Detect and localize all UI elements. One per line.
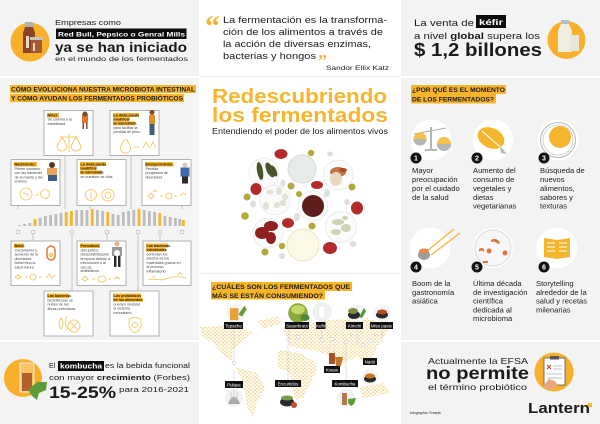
bar chart: diversity over life <box>16 209 185 234</box>
item 4: chopsticks: 4 <box>414 264 418 272</box>
title: los fermentados <box>212 104 388 127</box>
icon: kombucha glass with mint <box>4 359 47 400</box>
label: Kefir <box>316 322 326 329</box>
card: nacimiento: entorno <box>14 180 27 184</box>
item 1: health <box>410 120 460 202</box>
card: bacterias intestinales: controlan los <box>146 252 168 256</box>
text: el kombucha: es la bebida funcional <box>105 363 191 370</box>
label: Kvass <box>324 366 340 373</box>
card: bacterias beneficiosas <box>44 291 93 336</box>
heading: fermentados consumidos: ¿CUÁLES SON LOS FERMENTADOS QUE <box>212 284 350 291</box>
item 6: book: 6 <box>542 264 546 272</box>
card: dieta días: la microbiota <box>80 171 104 175</box>
item 5: petri microbiome: Última década <box>473 279 522 288</box>
item 6: book: alrededor de la <box>536 288 587 297</box>
card: bebé: Bebé: <box>14 244 25 248</box>
dotted world map <box>200 316 390 417</box>
label: Encurtidos: Encurtidos <box>278 381 299 386</box>
text: a nivel global supera los: a nivel global supera los <box>414 31 541 41</box>
label: Sauerkraut <box>285 322 309 329</box>
label: Kvass: Kvass <box>326 367 339 372</box>
card: bacterias intestinales <box>143 241 191 286</box>
label: Kimchi: Kimchi <box>348 323 361 328</box>
card: dieta peso: modificar <box>114 118 131 122</box>
label: kefir <box>476 15 506 28</box>
illustration: petri dishes with ferments <box>241 149 363 261</box>
item 5: petri microbiome: 5 <box>475 264 479 272</box>
card: bacterias intestinales: el proceso <box>146 265 164 269</box>
card: bacterias intestinales: inflamatorio <box>146 269 166 273</box>
item 2: vegetables: Aumento del <box>473 166 516 175</box>
panel: quote <box>205 10 389 72</box>
card: bacterias beneficiosas: Las bacterias <box>48 294 71 298</box>
card: niñez: estabilidad <box>48 122 65 126</box>
icon: fermented jars <box>10 22 50 62</box>
credit: Infographic: Freepik <box>410 411 441 415</box>
panel: empresas callout <box>10 18 189 63</box>
card: nacimiento: Primer contacto <box>14 167 40 171</box>
item 5: petri microbiome: microbioma <box>473 314 513 323</box>
card: bacterias intestinales: intestinales <box>146 248 167 252</box>
subtitle: Entendiendo el poder de los alimentos vivos <box>212 127 388 136</box>
icon: kefir <box>313 303 331 321</box>
item 2: vegetables <box>472 120 517 210</box>
heading: por qué <box>411 85 506 104</box>
card: niñez <box>44 110 93 156</box>
icon: clipboard <box>534 352 574 392</box>
text: para 2016-2021: para 2016-2021 <box>119 385 189 394</box>
icon: sauerkraut <box>288 303 310 323</box>
label: Kimchi <box>346 322 363 329</box>
icon: natto <box>362 368 378 386</box>
item 5: petri microbiome: científica <box>473 296 504 306</box>
label: Tepache: Tepache <box>225 323 242 328</box>
card: probióticos: inmunitario <box>114 311 132 315</box>
card: dieta días: en cuestión de días <box>80 175 113 179</box>
card: envejecimiento: diversidad <box>146 175 162 179</box>
item 2: vegetables: consumo de <box>473 175 514 184</box>
item 3: globe: alimentos, <box>540 184 575 193</box>
card: envejecimiento: progresiva de <box>146 171 168 175</box>
item 6: book: milenarias <box>536 306 571 314</box>
card: probióticos: Los probióticos <box>114 294 141 298</box>
card: bacterias intestinales: Las bacterias <box>146 244 170 248</box>
label: Red Bull, Pepsico o Genral Mills: Red Bull, Pepsico o Genral Mills <box>58 31 185 38</box>
card: bebé: Determina la <box>14 261 36 265</box>
panel: microbiota timeline <box>10 85 196 336</box>
text: La venta de: La venta de <box>414 18 474 28</box>
icon: pulque <box>225 389 243 407</box>
icon: miso paste <box>374 304 390 322</box>
card: nacimiento <box>11 160 60 206</box>
card: dieta peso <box>110 110 159 156</box>
item 3: globe: 3 <box>542 156 546 162</box>
text: 15-25%: 15-25% <box>49 384 116 402</box>
card: bacterias beneficiosas: beneficiosas se <box>48 298 73 302</box>
card: bebé <box>11 241 60 286</box>
text: el kombucha: El <box>49 363 56 370</box>
card: bebé: aumento de la <box>14 253 39 257</box>
text: con mayor crecimiento: con mayor crecimiento (Forbes) <box>49 373 191 382</box>
item 5: petri microbiome: de investigación <box>473 288 527 297</box>
card: bebé: salud futura <box>14 265 35 269</box>
item 4: chopsticks: gastronomía <box>412 288 455 297</box>
label: Pulque: Pulque <box>227 382 241 387</box>
item 2: vegetables: vegetales y <box>473 184 512 193</box>
card: probióticos: el sistema <box>114 307 131 311</box>
item 4: chopsticks: Boom de la <box>412 279 451 288</box>
item 3: globe <box>538 120 585 210</box>
card: bacterias beneficiosas: nutren de las <box>48 303 69 307</box>
heading: microbiota: CÓMO EVOLUCIONA NUESTRA MICROBIOTA INTESTINAL <box>11 85 195 93</box>
label: Encurtidos <box>275 380 301 387</box>
text: en el mundo de los fermentados: en el mundo de los fermentados <box>55 56 189 63</box>
label: Miso paste <box>370 322 393 329</box>
text: ya se han iniciado: ya se han iniciado <box>55 40 187 55</box>
text: Empresas como: Empresas como <box>55 18 121 27</box>
item 6: book <box>536 228 587 314</box>
card: envejecimiento: Envejecimiento: <box>146 162 174 166</box>
item 5: petri microbiome <box>472 228 527 323</box>
card: bacterias intestinales: efectos de los <box>146 257 169 261</box>
quote text: La fermentación es la transforma- <box>223 15 387 25</box>
item 1: health: Mayor <box>412 166 434 175</box>
item 3: globe: Búsqueda de <box>540 166 585 175</box>
label: Pulque <box>225 381 243 388</box>
card: periodos disruptivos: infecciones o al <box>80 261 106 265</box>
icon: kefir bottles <box>548 20 586 59</box>
item 1: health: de la salud <box>412 193 449 202</box>
label: Kefir: Kefir <box>316 323 326 328</box>
text: el término probiótico: el término probiótico <box>428 383 528 392</box>
icon: kimchi <box>348 304 366 322</box>
item 3: globe: nuevos <box>540 175 565 184</box>
icon: closing quote marks: ” <box>318 51 327 71</box>
icon: tepache <box>226 303 247 323</box>
card: periodos disruptivos: temporal debido a <box>80 257 111 261</box>
item 1: health: 1 <box>414 156 418 162</box>
card: dieta peso: la microbiota <box>114 122 137 126</box>
label: Red Bull, Pepsico o Genral Mills <box>56 28 186 39</box>
card: bacterias beneficiosas: fibras prebióticas <box>48 307 76 311</box>
quote text: la acción de diversas enzimas, <box>223 39 371 49</box>
item 6: book: Storytelling <box>536 279 574 288</box>
item 2: vegetables: vegetarianas <box>473 202 517 210</box>
label: kefir: kéfir <box>479 17 504 27</box>
card: periodos disruptivos: Desestabilización <box>80 253 109 257</box>
card: bacterias intestinales: materiales grasos en <box>146 261 181 265</box>
heading: microbiota: Y CÓMO AYUDAN LOS FERMENTADOS PROBIÓTICOS <box>11 94 183 102</box>
item 1: health: por el cuidado <box>412 184 460 193</box>
heading: por qué: DE LOS FERMENTADOS? <box>412 96 494 104</box>
card: bebé: Crecimiento y <box>14 248 37 252</box>
text: el kombucha: kombucha <box>60 364 102 370</box>
text: Actualmente la EFSA: Actualmente la EFSA <box>428 356 528 366</box>
card: periodos disruptivos: disruptivos: <box>80 248 99 252</box>
card: probióticos <box>110 291 159 336</box>
card: dieta peso: para facilitar la <box>114 126 138 130</box>
card: probióticos: en los alimentos <box>114 298 142 302</box>
card: dieta días: modificar <box>80 166 98 170</box>
card: periodos disruptivos: uso de <box>80 265 92 269</box>
card: dieta peso: La dieta puede <box>114 113 139 117</box>
text: no permite: no permite <box>426 363 529 383</box>
card: periodos disruptivos: Periodicos <box>80 244 99 248</box>
item 1: health: preocupación <box>412 175 458 184</box>
text: el kombucha <box>49 361 191 371</box>
logo: Lantern: Lantern <box>528 400 590 417</box>
item 5: petri microbiome: dedicada al <box>473 306 512 314</box>
item 2: vegetables: dietas <box>473 193 493 202</box>
panel: EFSA callout <box>410 352 592 417</box>
panel: por qué ahora <box>410 85 587 323</box>
card: periodos disruptivos: antibióticos <box>80 269 99 273</box>
card: periodos disruptivos <box>77 241 126 286</box>
icon: encurtidos <box>280 396 297 408</box>
label: Tepache <box>224 322 243 329</box>
card: dieta días: La dieta puede <box>80 162 106 166</box>
icon: kvass <box>329 353 343 366</box>
card: dieta peso: pérdida de peso. <box>114 130 141 134</box>
card: envejecimiento: Pérdida <box>146 167 159 171</box>
item 6: book: salud y recetas <box>536 296 587 306</box>
item 4: chopsticks: asiática <box>412 296 439 306</box>
panel: kefir callout <box>414 15 586 60</box>
card: niñez: Niñez <box>48 114 57 118</box>
card: bebé: diversidad. <box>14 257 32 261</box>
card: nacimiento: con las bacterias <box>14 171 42 175</box>
item 3: globe: sabores y <box>540 193 573 202</box>
label: Sauerkraut: Sauerkraut <box>286 323 309 328</box>
heading: microbiota <box>10 85 196 102</box>
quote text: bacterias y hongos <box>223 51 317 61</box>
item 2: vegetables: 2 <box>475 156 479 162</box>
label: Natto <box>363 358 377 365</box>
item 4: chopsticks <box>410 228 460 306</box>
heading: fermentados consumidos <box>211 282 352 300</box>
heading: fermentados consumidos: MÁS SE ESTÁN CONSUMIENDO? <box>212 293 323 300</box>
card: probióticos: pueden modular <box>114 302 141 306</box>
label: Kombucha <box>332 380 358 387</box>
card: nacimiento: Nacimiento: <box>14 162 36 166</box>
icon: kombucha <box>337 389 356 407</box>
card: nacimiento: de la madre y del <box>14 175 43 179</box>
quote text <box>223 15 387 61</box>
text: 1,2 billones: $ 1,2 billones <box>414 40 542 60</box>
heading: por qué: ¿POR QUÉ ES EL MOMENTO <box>412 86 505 94</box>
quote author: Sandor Ellix Katz <box>326 65 389 72</box>
quote text: ción de los alimentos a través de <box>223 27 383 37</box>
card: envejecimiento <box>142 160 191 206</box>
title: Redescubriendo <box>212 85 387 108</box>
item 3: globe: texturas <box>540 202 567 210</box>
label: Kombucha: Kombucha <box>334 381 356 386</box>
card: niñez: Se camina a la <box>48 118 73 122</box>
card: dieta días <box>77 160 126 206</box>
label: Natto: Nattō <box>365 359 376 364</box>
panel: kombucha callout <box>4 359 191 402</box>
title <box>212 85 388 127</box>
icon: opening quote marks: “ <box>205 10 220 43</box>
panel: world map of ferments <box>200 282 393 417</box>
label: Miso paste: Miso paste <box>371 323 393 328</box>
